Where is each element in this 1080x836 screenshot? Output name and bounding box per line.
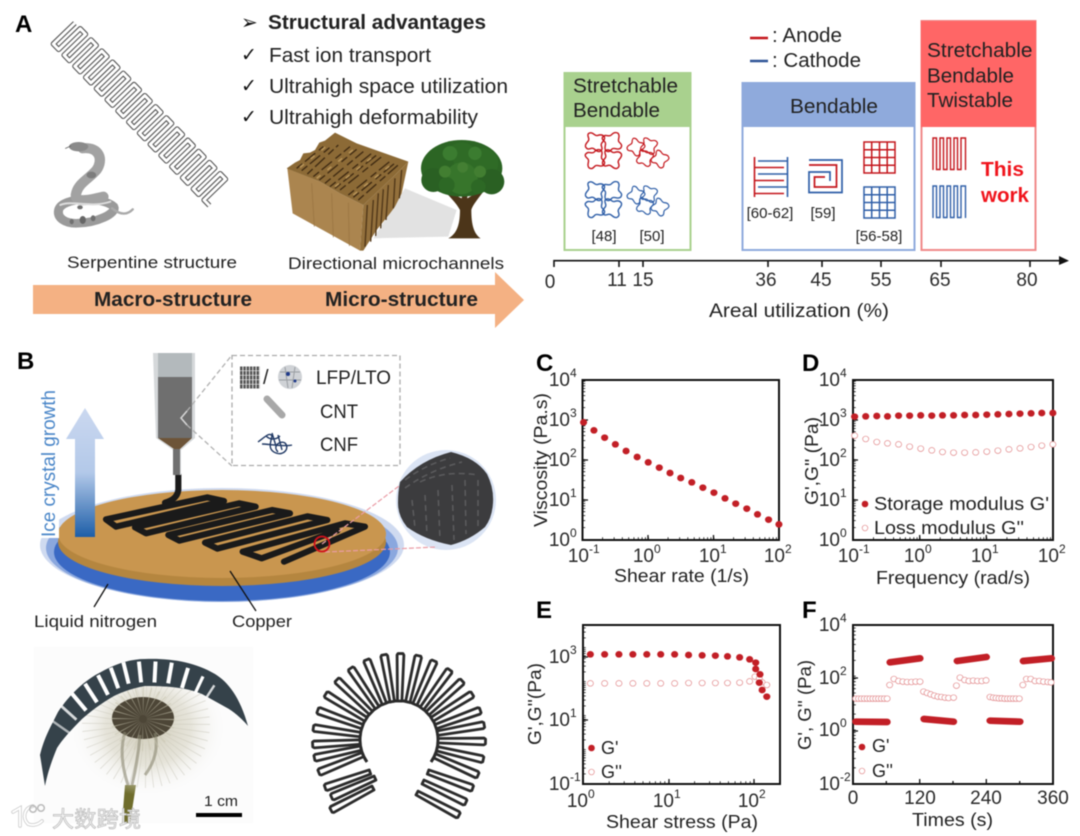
chart D: frequency sweep: -1 xyxy=(859,542,870,556)
icon: snake xyxy=(58,142,133,224)
printed serpentine filament xyxy=(106,475,365,562)
structural advantages list: Ultrahigh deformability xyxy=(269,107,478,129)
chart C: viscosity: Viscosity (Pa.s) xyxy=(531,393,551,527)
structural advantages list: ✓ xyxy=(241,106,257,128)
inset: filament cross section xyxy=(396,450,496,550)
chart D: frequency sweep: 10 xyxy=(971,546,992,567)
chart D: frequency sweep: 3 xyxy=(840,406,847,420)
chart F: thixotropy recovery: 360 xyxy=(1037,788,1069,809)
watermark xyxy=(13,805,141,832)
structural advantages list: ✓ xyxy=(241,44,257,66)
caption: serpentine structure: Serpentine structure xyxy=(67,253,237,272)
chart E: amplitude sweep: -1 xyxy=(570,770,581,784)
panel: stretchable bendable twistable (red): work xyxy=(980,185,1030,207)
chart D: frequency sweep: 4 xyxy=(840,366,847,380)
chart D: frequency sweep: G',G'' (Pa) xyxy=(802,417,822,505)
chart F: thixotropy recovery: 120 xyxy=(904,788,936,809)
chart F: thixotropy recovery: 2 xyxy=(840,664,847,678)
panel: stretchable bendable twistable (red): Twistable xyxy=(927,90,1013,112)
arrow: macro to micro structure: Macro-structure xyxy=(94,289,252,311)
chart E: amplitude sweep: 10 xyxy=(549,710,570,731)
panel: stretchable bendable (green) xyxy=(564,73,691,250)
areal utilization axis: 45 xyxy=(810,270,832,291)
structural advantages list: Ultrahigh space utilization xyxy=(269,76,508,98)
chart D: frequency sweep: 10 xyxy=(904,546,925,567)
structural advantages list: ➢ xyxy=(241,10,258,34)
chart E: amplitude sweep: 10 xyxy=(549,647,570,668)
watermark: 大数跨境 xyxy=(52,807,141,832)
chart F: thixotropy recovery: 10 xyxy=(819,615,840,636)
photo: arch on dandelion: 1 cm xyxy=(204,793,238,810)
photo: arch on dandelion xyxy=(34,647,253,823)
chart F: thixotropy recovery: Times (s) xyxy=(912,810,993,830)
chart C: viscosity: 2 xyxy=(785,542,792,556)
panel: bendable (blue): [60-62] xyxy=(747,205,793,222)
photo: curved serpentine horseshoe xyxy=(312,653,486,818)
liquid nitrogen base xyxy=(40,488,404,602)
chart E: amplitude sweep: 0 xyxy=(588,787,595,801)
structural advantages list xyxy=(241,10,508,129)
ice crystal growth label: Ice crystal growth xyxy=(39,390,60,537)
chart D: frequency sweep: 10 xyxy=(819,450,840,471)
chart C: viscosity: 10 xyxy=(549,370,570,391)
chart F: thixotropy recovery: G' xyxy=(872,736,889,756)
callout: ink composition: CNF xyxy=(320,435,358,456)
chart D: frequency sweep: 10 xyxy=(819,410,840,431)
chart D: frequency sweep: 0 xyxy=(925,542,932,556)
chart E: amplitude sweep: Shear stress (Pa) xyxy=(606,812,758,832)
chart F: thixotropy recovery: 4 xyxy=(840,611,847,625)
panel B label: B xyxy=(17,348,34,375)
chart E: amplitude sweep: 3 xyxy=(570,643,577,657)
chart C: viscosity: 10 xyxy=(549,450,570,471)
chart F: thixotropy recovery: F xyxy=(802,597,817,624)
arrow: ice crystal growth xyxy=(66,408,104,537)
chart D: frequency sweep: 1 xyxy=(992,542,999,556)
chart F: thixotropy recovery: G', G'' (Pa) xyxy=(795,660,815,750)
panel: stretchable bendable (green): Bendable xyxy=(573,100,660,122)
chart E: amplitude sweep: E xyxy=(536,597,552,624)
chart C: viscosity: 3 xyxy=(570,406,577,420)
chart D: frequency sweep: 10 xyxy=(1038,546,1059,567)
areal utilization axis: 55 xyxy=(870,270,892,291)
leader lines xyxy=(94,571,256,611)
legend: anode and cathode: : Anode xyxy=(772,25,842,47)
chart C: viscosity: 0 xyxy=(570,526,577,540)
chart C: viscosity xyxy=(531,350,792,586)
legend: anode and cathode: : Cathode xyxy=(772,50,861,72)
chart D: frequency sweep: 2 xyxy=(1059,542,1066,556)
chart E: amplitude sweep: 10 xyxy=(567,791,588,812)
panel: bendable (blue): Bendable xyxy=(790,96,878,118)
chart C: viscosity: 10 xyxy=(568,546,589,567)
arrow: macro to micro structure: Micro-structure xyxy=(325,289,478,311)
areal utilization axis: 0 xyxy=(545,272,555,293)
areal utilization axis: 15 xyxy=(632,270,654,291)
panel: stretchable bendable (green): [50] xyxy=(639,228,665,245)
caption: directional microchannels: Directional microchannels xyxy=(288,254,504,273)
panel: stretchable bendable twistable (red): This xyxy=(981,159,1024,181)
chart F: thixotropy recovery: 10 xyxy=(819,720,840,741)
panel: stretchable bendable twistable (red) xyxy=(921,21,1036,250)
chart C: viscosity: 4 xyxy=(570,366,577,380)
legend: anode and cathode xyxy=(750,25,861,72)
chart C: viscosity: 10 xyxy=(549,530,570,551)
panel: stretchable bendable twistable (red): Bendable xyxy=(927,66,1014,88)
copper plate xyxy=(58,490,386,586)
chart E: amplitude sweep: 2 xyxy=(759,787,766,801)
chart F: thixotropy recovery: 10 xyxy=(819,774,840,795)
panel: bendable (blue): [59] xyxy=(810,205,836,222)
areal utilization axis: 11 xyxy=(607,270,627,291)
areal utilization axis: 65 xyxy=(929,270,951,291)
chart E: amplitude sweep: G'' xyxy=(601,762,622,782)
chart C: viscosity: 1 xyxy=(720,542,727,556)
panel A label: A xyxy=(15,11,32,38)
chart C: viscosity: -1 xyxy=(589,542,600,556)
chart D: frequency sweep: Frequency (rad/s) xyxy=(876,568,1030,588)
chart D: frequency sweep: 10 xyxy=(819,370,840,391)
chart F: thixotropy recovery: 0 xyxy=(840,716,847,730)
label: copper: Copper xyxy=(232,612,292,631)
chart F: thixotropy recovery: G'' xyxy=(872,761,893,781)
chart D: frequency sweep: 0 xyxy=(840,526,847,540)
chart F: thixotropy recovery: 10 xyxy=(819,668,840,689)
chart D: frequency sweep: Storage modulus G' xyxy=(874,494,1049,514)
chart D: frequency sweep: 1 xyxy=(840,486,847,500)
structural advantages list: Fast ion transport xyxy=(269,45,431,67)
areal utilization axis xyxy=(545,256,1069,322)
panel: stretchable bendable twistable (red): Stretchable xyxy=(927,40,1032,62)
chart D: frequency sweep xyxy=(802,350,1066,588)
panel: bendable (blue) xyxy=(742,83,915,250)
chart F: thixotropy recovery xyxy=(795,597,1069,830)
red marker circle and zoom guides xyxy=(314,486,437,552)
chart C: viscosity: 10 xyxy=(699,546,720,567)
chart D: frequency sweep: Loss modulus G'' xyxy=(874,518,1024,538)
chart D: frequency sweep: 10 xyxy=(819,490,840,511)
callout: ink composition xyxy=(181,355,400,466)
areal utilization axis: 36 xyxy=(755,270,777,291)
chart F: thixotropy recovery: 0 xyxy=(848,788,858,809)
chart C: viscosity: 10 xyxy=(549,490,570,511)
panel: bendable (blue): [56-58] xyxy=(856,228,902,245)
callout: ink composition: / xyxy=(263,367,269,389)
arrow: macro to micro structure xyxy=(33,272,524,328)
chart C: viscosity: 2 xyxy=(570,446,577,460)
chart C: viscosity: 0 xyxy=(654,542,661,556)
chart E: amplitude sweep: 10 xyxy=(653,791,674,812)
chart E: amplitude sweep: 1 xyxy=(570,706,577,720)
chart E: amplitude sweep: G',G''(Pa) xyxy=(525,663,545,745)
chart E: amplitude sweep xyxy=(525,597,780,832)
chart E: amplitude sweep: G' xyxy=(601,738,618,758)
structural advantages list: ✓ xyxy=(241,75,257,97)
label: liquid nitrogen: Liquid nitrogen xyxy=(34,612,157,631)
callout: ink composition: CNT xyxy=(320,402,358,423)
chart E: amplitude sweep: 10 xyxy=(549,774,570,795)
chart C: viscosity: 1 xyxy=(570,486,577,500)
chart D: frequency sweep: D xyxy=(802,350,819,377)
chart C: viscosity: 10 xyxy=(633,546,654,567)
serpentine ribbon xyxy=(53,23,231,206)
chart D: frequency sweep: 10 xyxy=(838,546,859,567)
panel: stretchable bendable (green): Stretchable xyxy=(573,76,678,98)
panel: stretchable bendable (green): [48] xyxy=(591,228,617,245)
areal utilization axis: Areal utilization (%) xyxy=(709,301,889,322)
icon: wood block and tree xyxy=(287,133,504,251)
chart C: viscosity: 10 xyxy=(549,410,570,431)
chart C: viscosity: Shear rate (1/s) xyxy=(614,566,749,586)
chart E: amplitude sweep: 1 xyxy=(674,787,681,801)
structural advantages list: Structural advantages xyxy=(268,12,486,34)
syringe nozzle xyxy=(153,353,195,475)
chart C: viscosity: C xyxy=(536,350,553,377)
chart E: amplitude sweep: 10 xyxy=(738,791,759,812)
callout: ink composition: LFP/LTO xyxy=(316,368,391,389)
chart C: viscosity: 10 xyxy=(764,546,785,567)
chart D: frequency sweep: 2 xyxy=(840,446,847,460)
areal utilization axis: 80 xyxy=(1016,270,1038,291)
chart D: frequency sweep: 10 xyxy=(819,530,840,551)
chart F: thixotropy recovery: 240 xyxy=(970,788,1002,809)
chart F: thixotropy recovery: -2 xyxy=(840,770,851,784)
